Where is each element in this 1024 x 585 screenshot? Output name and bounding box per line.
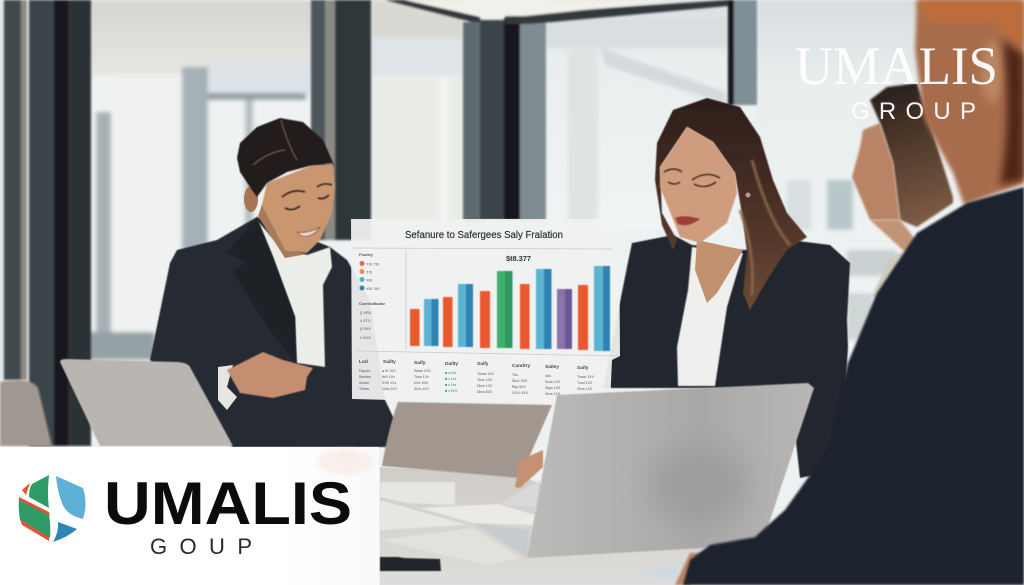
foreground neck and head bbox=[915, 0, 1024, 205]
woman face bbox=[660, 127, 737, 243]
bar chart bbox=[410, 266, 610, 351]
data table: Tks bbox=[512, 373, 518, 377]
top right wordmark bbox=[795, 36, 998, 125]
woman facial features bbox=[664, 169, 720, 187]
data table: SIXs 1XX bbox=[414, 387, 430, 391]
man ear bbox=[244, 186, 258, 212]
man hand bbox=[227, 352, 313, 398]
papers and keyboard on table bbox=[380, 480, 678, 580]
data table: Candtry bbox=[512, 363, 530, 369]
chart title: Sefanure to Safergees Saly Fralation bbox=[405, 229, 563, 241]
data table: Xks bbox=[545, 374, 551, 378]
data table: Dkxs 1XX bbox=[477, 384, 493, 388]
data table: Sxcs 1XX bbox=[545, 380, 561, 384]
woman mouth bbox=[675, 216, 700, 225]
man on the left bbox=[150, 118, 397, 447]
third woman face bbox=[852, 123, 900, 220]
man jacket bbox=[150, 217, 397, 447]
calculator bbox=[502, 480, 540, 507]
phone bbox=[380, 557, 441, 571]
note paper bbox=[640, 563, 678, 580]
top wordmark group: GROUP bbox=[851, 98, 976, 125]
faint hand behind panel bbox=[317, 449, 373, 475]
data table: Tkxe 1XX bbox=[477, 378, 493, 382]
data table: ltvS 1Xx bbox=[382, 375, 395, 379]
legend: XKI 3XI bbox=[366, 286, 380, 291]
data table: SXH 1Xx bbox=[382, 381, 396, 385]
data table: ■ x 1xx bbox=[445, 383, 457, 387]
data table: Saify bbox=[577, 365, 589, 371]
meeting table bbox=[380, 467, 720, 585]
laptop lid bbox=[527, 383, 814, 558]
legend: Foolley bbox=[359, 252, 374, 257]
foreground suit bbox=[683, 187, 1024, 585]
data table: Dkxs 5XX bbox=[477, 390, 493, 394]
foreground person bbox=[675, 0, 1024, 585]
legend: ≥ 2TX bbox=[360, 318, 371, 323]
data table: Txsd 1XX bbox=[577, 381, 593, 385]
keyboard bbox=[380, 482, 455, 505]
data table bbox=[359, 359, 595, 396]
logo wordmark umalis: UMALIS bbox=[104, 470, 352, 537]
data table: Thsws bbox=[359, 387, 369, 391]
man lapels bbox=[227, 217, 296, 363]
chair middle bbox=[382, 402, 552, 478]
data table: DX1 5XX bbox=[414, 381, 429, 385]
chair left bbox=[0, 380, 52, 446]
man shirt cuff bbox=[218, 365, 237, 410]
data table: ■ xx 5x bbox=[445, 371, 457, 375]
chart panel bbox=[351, 219, 620, 405]
data table: 1XXL 5XX bbox=[512, 391, 529, 395]
woman neck bbox=[695, 240, 743, 303]
woman earring bbox=[746, 192, 750, 198]
laptop base bbox=[473, 523, 530, 558]
legend: Coentolibutar bbox=[359, 301, 385, 306]
legend: § XRX bbox=[360, 310, 372, 315]
man hair parting bbox=[253, 120, 297, 165]
chart value: $t8.377 bbox=[506, 254, 531, 263]
data table: Sks1 5XX bbox=[512, 379, 528, 383]
data table: Sailey bbox=[545, 364, 559, 370]
foreground ear bbox=[981, 40, 1003, 104]
foreground hair bbox=[917, 0, 1024, 50]
data table: Seedes bbox=[359, 375, 371, 379]
man facial features bbox=[282, 184, 332, 210]
man shirt bbox=[257, 220, 332, 367]
laptop lid shadow bbox=[650, 447, 750, 523]
woman shirt bbox=[677, 247, 743, 386]
third woman bbox=[852, 83, 953, 300]
legend: XKI bbox=[366, 278, 372, 282]
data table: ■ x 1xx bbox=[445, 377, 457, 381]
man neck bbox=[258, 205, 307, 258]
window frames bbox=[4, 0, 757, 446]
woman jacket bbox=[603, 235, 850, 478]
logo icon bbox=[19, 475, 86, 542]
data table: Dailty bbox=[445, 361, 458, 367]
data table: Txscn 1XX bbox=[577, 375, 595, 379]
legend: ≥ 5XS bbox=[360, 335, 371, 340]
left laptop bbox=[60, 359, 233, 446]
legend: TXI bbox=[366, 270, 372, 274]
woman hair highlights bbox=[740, 160, 790, 295]
top wordmark umalis: UMALIS bbox=[795, 36, 998, 96]
man mouth bbox=[297, 227, 320, 236]
data table: Saify bbox=[477, 361, 489, 367]
data table: Xkxs 1XX bbox=[577, 387, 593, 391]
data table: Tkxas 1XX bbox=[477, 372, 495, 376]
central laptop bbox=[473, 383, 814, 558]
third woman garment bbox=[872, 250, 905, 300]
third woman neck bbox=[870, 220, 920, 252]
central woman bbox=[603, 98, 850, 478]
legend bbox=[359, 252, 385, 340]
data table: ■ x 5XX bbox=[445, 389, 458, 393]
data table: Sailty bbox=[383, 359, 396, 365]
woman hand bbox=[515, 450, 543, 488]
legend: § 9XX bbox=[360, 326, 371, 331]
man hair bbox=[237, 118, 335, 197]
data table: Xkxs 1XX bbox=[545, 392, 561, 396]
data table: Xkps 1XX bbox=[545, 386, 561, 390]
data table: Saify bbox=[414, 360, 426, 366]
data table: 1XIa 2XX bbox=[382, 387, 397, 391]
data table: Lod bbox=[359, 359, 368, 365]
legend: TXI 7XI bbox=[366, 262, 379, 266]
logo panel bbox=[0, 447, 379, 585]
foreground hand bbox=[675, 553, 702, 585]
data table: Thse 1Xx bbox=[414, 375, 429, 379]
third woman hair bbox=[870, 83, 953, 227]
woman hair bbox=[655, 98, 807, 310]
foreground dark hairline bbox=[1000, 40, 1024, 185]
data table: Dspoer bbox=[359, 369, 371, 373]
man face bbox=[260, 165, 335, 253]
data table: ● ltr 1XX bbox=[382, 369, 396, 373]
logo wordmark goup: GOUP bbox=[150, 534, 252, 559]
data table: Sraoer bbox=[359, 381, 370, 385]
data table: Rkp 5XX bbox=[512, 385, 526, 389]
data table: Sktas 1XG bbox=[414, 369, 431, 373]
